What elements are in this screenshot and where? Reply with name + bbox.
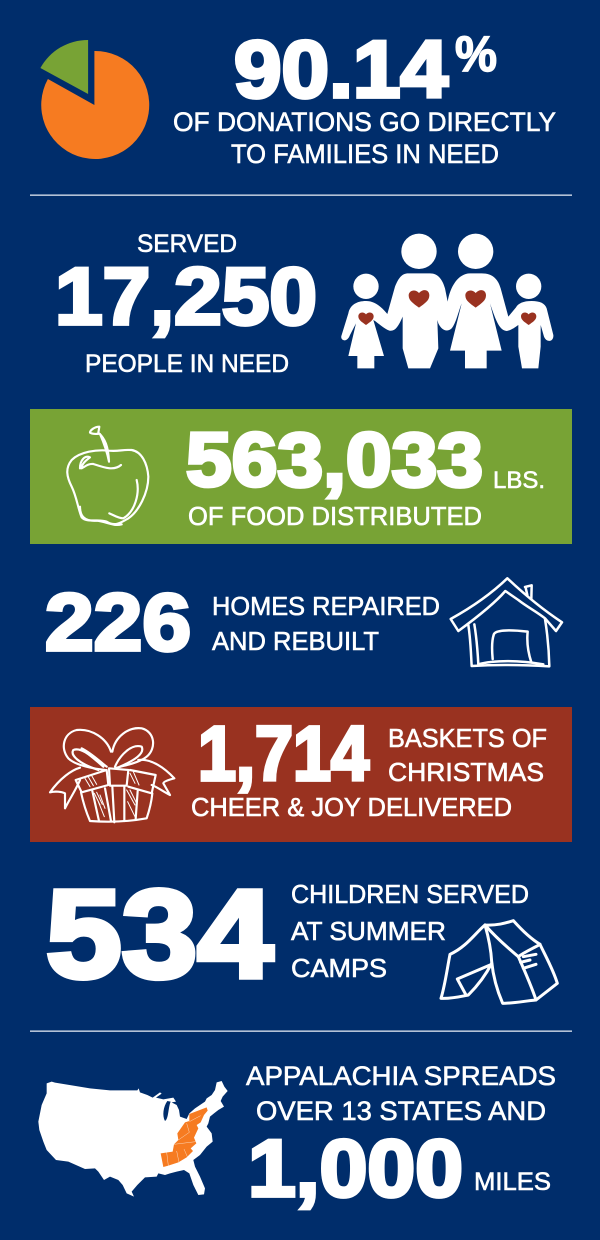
stat: served 17,250 people: SERVED <box>137 230 237 258</box>
stat: homes repaired: HOMES REPAIRED <box>212 591 440 621</box>
stat: homes repaired: AND REBUILT <box>212 626 379 656</box>
heading: 90.14% of donations: OF DONATIONS GO DIRECTLY <box>173 107 556 137</box>
heading: 90.14% of donations: 90.14 <box>234 25 448 115</box>
stat: Appalachia 1,000 miles: 1,000 <box>248 1124 463 1214</box>
panel: Christmas baskets: 1,714 <box>198 711 369 797</box>
panel: Christmas baskets: BASKETS OF <box>388 725 547 753</box>
stat: Appalachia 1,000 miles: OVER 13 STATES AND <box>256 1096 546 1126</box>
icon: gift box <box>50 728 174 822</box>
panel: food distributed: OF FOOD DISTRIBUTED <box>188 503 482 531</box>
pie chart: 90.14 percent <box>40 40 149 159</box>
heading: 90.14% of donations: % <box>455 26 497 82</box>
stat: children at summer camps: 534 <box>46 865 273 1004</box>
map: United States with Appalachia highlighted <box>38 1081 228 1197</box>
icon: apple <box>67 427 148 525</box>
stat: served 17,250 people: 17,250 <box>55 252 317 342</box>
heading: 90.14% of donations: TO FAMILIES IN NEED <box>231 139 499 169</box>
icon: family with hearts <box>341 234 553 368</box>
stat: children at summer camps: CHILDREN SERVED <box>291 879 529 909</box>
stat: Appalachia 1,000 miles: APPALACHIA SPREADS <box>246 1061 556 1091</box>
panel: food distributed: LBS. <box>493 467 545 494</box>
panel: food distributed: 563,033 <box>186 418 483 503</box>
heading: 90.14% of donations <box>173 25 556 169</box>
stat: homes repaired: 226 <box>45 578 191 668</box>
panel: Christmas baskets <box>30 707 572 842</box>
panel: food distributed <box>30 409 572 544</box>
stat: children at summer camps <box>46 865 529 1004</box>
icon: tent <box>441 921 557 1003</box>
stat: children at summer camps: AT SUMMER <box>291 916 446 946</box>
panel: Christmas baskets: CHEER & JOY DELIVERED <box>191 794 512 822</box>
stat: Appalachia 1,000 miles: MILES <box>474 1168 551 1196</box>
stat: Appalachia 1,000 miles <box>246 1061 556 1214</box>
icon: house <box>451 578 562 666</box>
stat: served 17,250 people: PEOPLE IN NEED <box>85 350 289 378</box>
stat: homes repaired <box>45 578 440 668</box>
stat: children at summer camps: CAMPS <box>291 953 387 983</box>
panel: Christmas baskets: CHRISTMAS <box>388 759 544 787</box>
stat: served 17,250 people <box>55 230 317 378</box>
